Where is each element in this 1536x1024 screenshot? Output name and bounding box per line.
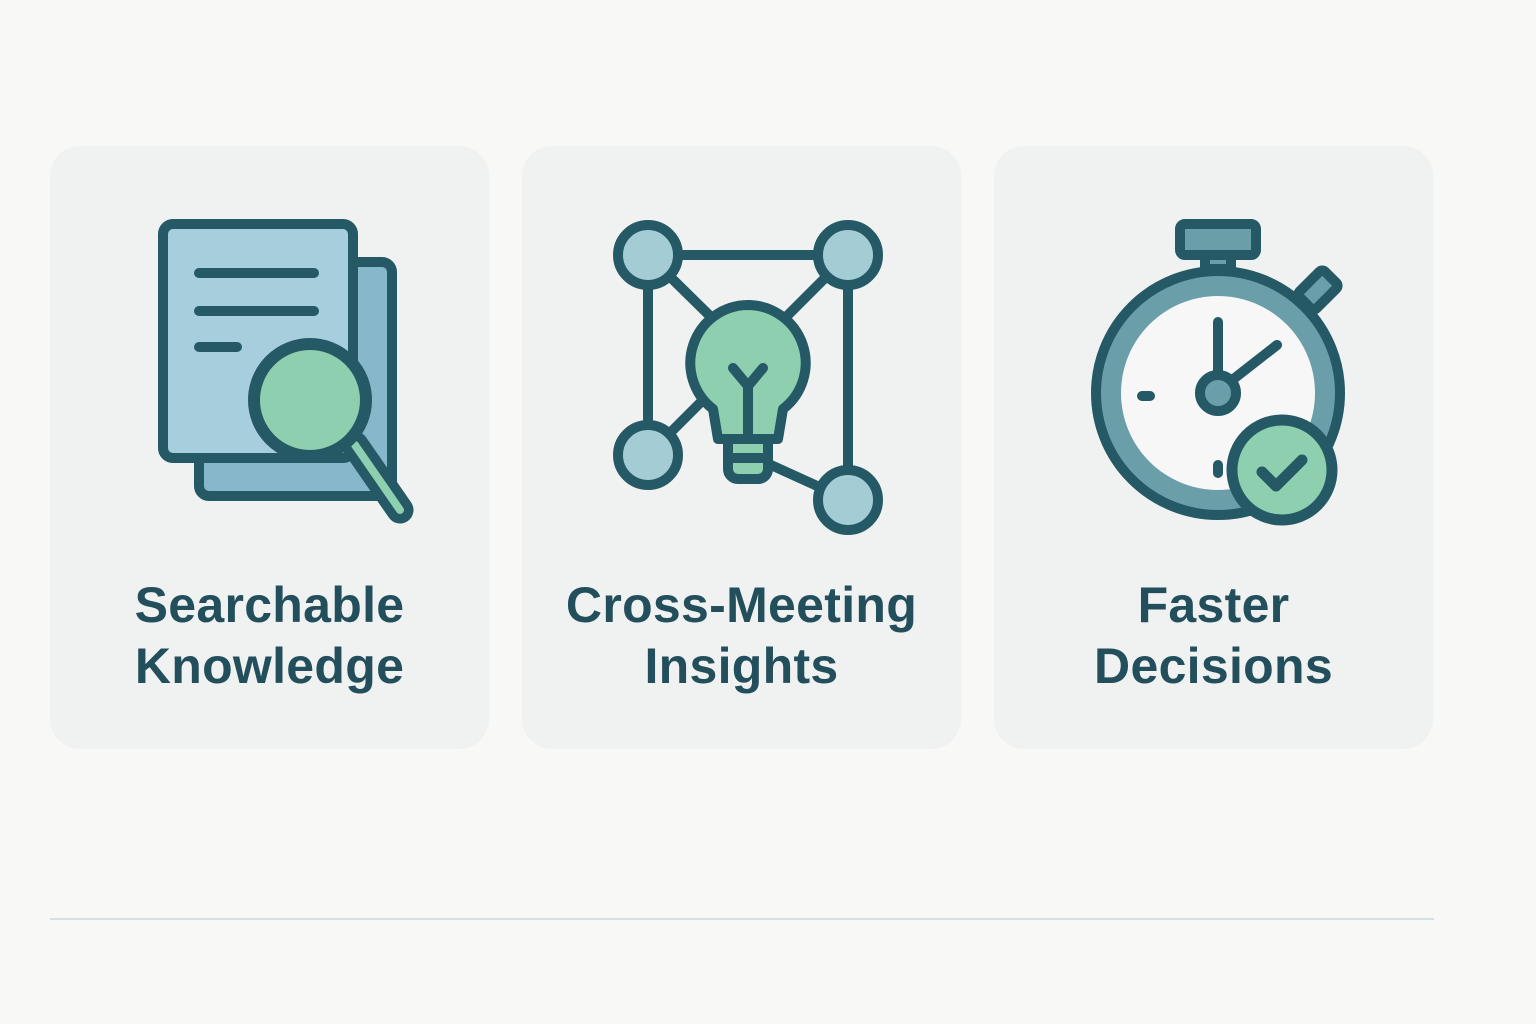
label: cross-meeting insights: Insights bbox=[644, 638, 839, 694]
label: faster decisions bbox=[1094, 577, 1333, 694]
label: searchable knowledge bbox=[135, 577, 404, 694]
label: searchable knowledge: Knowledge bbox=[135, 638, 404, 694]
label: faster decisions: Decisions bbox=[1094, 638, 1333, 694]
label: cross-meeting insights: Cross-Meeting bbox=[566, 577, 917, 633]
card: cross-meeting insights bbox=[522, 146, 961, 749]
label: searchable knowledge: Searchable bbox=[135, 577, 404, 633]
card: searchable knowledge bbox=[50, 146, 489, 749]
card: faster decisions bbox=[994, 146, 1433, 749]
icon: stopwatch with check bbox=[1096, 224, 1340, 520]
icon: documents with magnifier bbox=[163, 224, 400, 510]
label: faster decisions: Faster bbox=[1138, 577, 1289, 633]
icon: network with lightbulb bbox=[618, 225, 878, 530]
label: cross-meeting insights bbox=[566, 577, 917, 694]
